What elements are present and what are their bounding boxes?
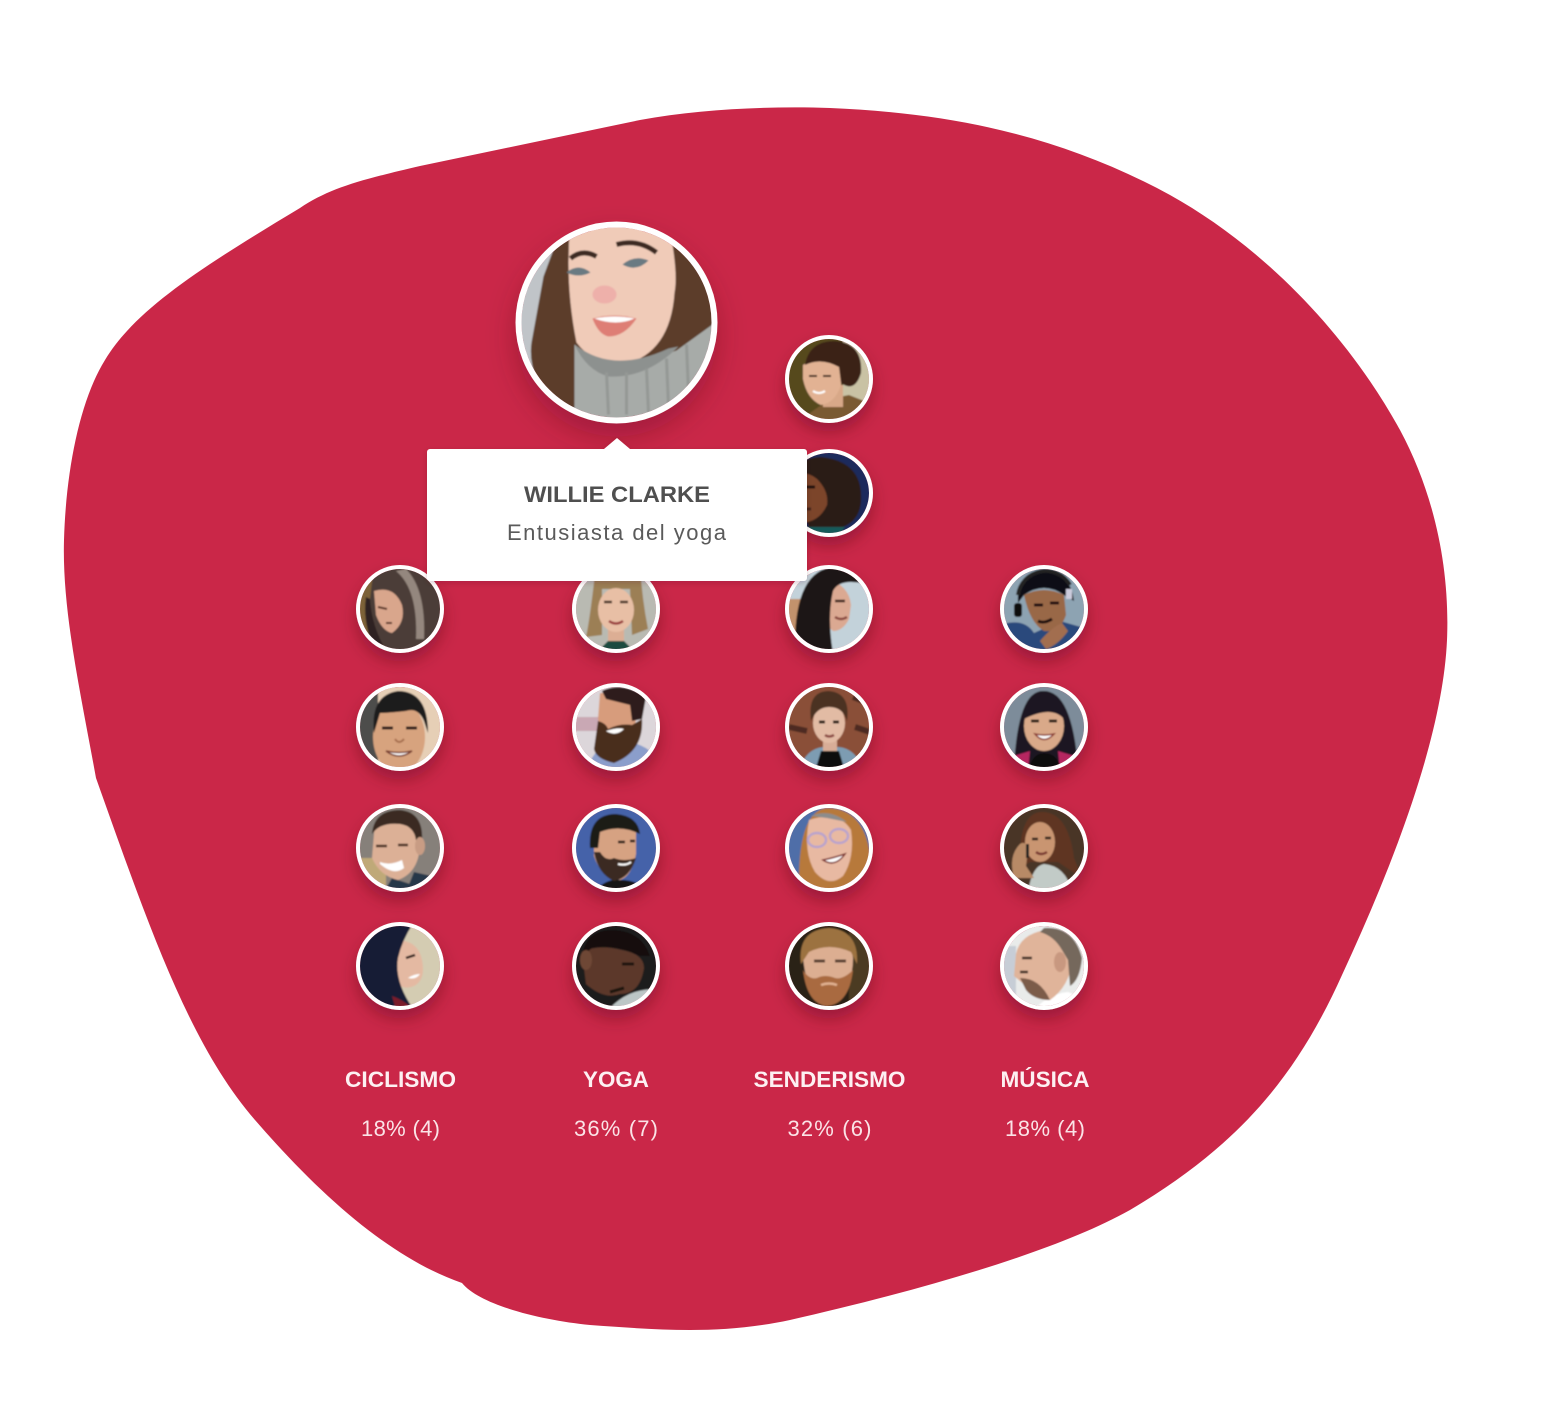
label: musica	[1000, 1067, 1090, 1141]
label: senderismo	[754, 1067, 906, 1141]
avatar: ciclismo 3	[356, 804, 444, 892]
avatar: ciclismo 1	[356, 565, 444, 653]
avatar: yoga 4	[572, 922, 660, 1010]
avatar: yoga 3	[572, 804, 660, 892]
label: senderismo: 32% (6)	[788, 1116, 872, 1141]
avatar: senderismo 2	[785, 683, 873, 771]
avatar: senderismo extra 1	[785, 335, 873, 423]
avatar: musica 4	[1000, 922, 1088, 1010]
avatar: senderismo 3	[785, 804, 873, 892]
label: yoga: 36% (7)	[574, 1116, 658, 1141]
label: yoga: YOGA	[583, 1067, 649, 1092]
background blob	[64, 107, 1447, 1330]
label: musica: MÚSICA	[1000, 1067, 1090, 1092]
avatar: ciclismo 4	[356, 922, 444, 1010]
tooltip name: WILLIE CLARKE	[524, 482, 710, 507]
label: musica: 18% (4)	[1005, 1116, 1085, 1141]
avatar: yoga 2	[572, 683, 660, 771]
label: senderismo: SENDERISMO	[754, 1067, 906, 1092]
label: ciclismo: 18% (4)	[361, 1116, 440, 1141]
avatar: senderismo 4	[785, 922, 873, 1010]
label: ciclismo	[345, 1067, 456, 1141]
avatar: senderismo 1	[785, 565, 873, 653]
chart: people by hobby	[356, 335, 1088, 1010]
avatar: yoga 1	[572, 565, 660, 653]
avatar: musica 2	[1000, 683, 1088, 771]
label: yoga	[574, 1067, 658, 1141]
tooltip card	[427, 438, 807, 581]
avatar: musica 3	[1000, 804, 1088, 892]
avatar: senderismo extra 2	[785, 449, 873, 537]
avatar: selected person large	[516, 222, 716, 422]
label: ciclismo: CICLISMO	[345, 1067, 456, 1092]
tooltip role: Entusiasta del yoga	[507, 520, 727, 545]
tooltip	[427, 438, 807, 581]
avatar: musica 1	[1000, 565, 1088, 653]
avatar: ciclismo 2	[356, 683, 444, 773]
